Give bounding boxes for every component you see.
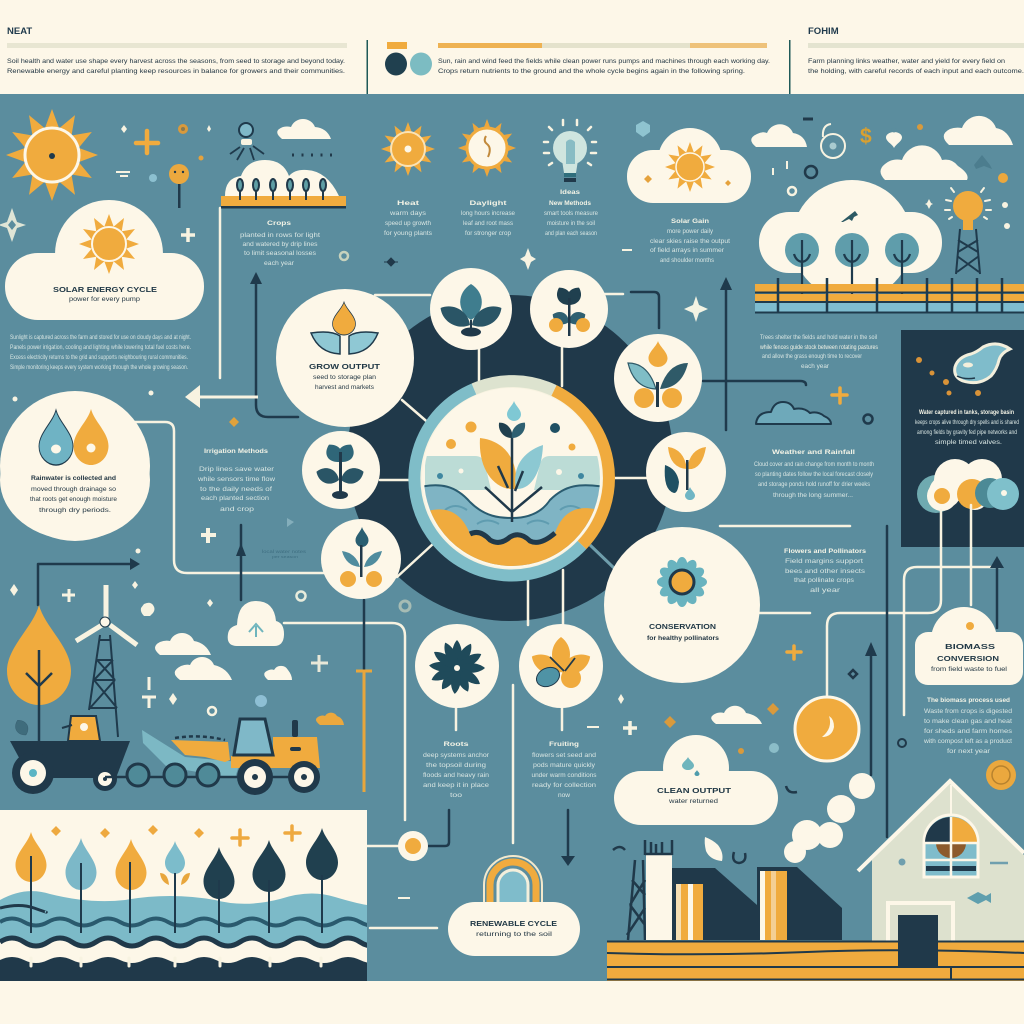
node: big top left: GROW OUTPUT xyxy=(309,362,381,371)
text blocks: three columns: for stronger crop xyxy=(465,231,512,237)
node: leaf top xyxy=(430,268,512,350)
header column: right: FOHIM xyxy=(808,26,839,37)
text block: mid right: and storage ponds hold runoff for drier weeks xyxy=(758,482,870,488)
text blocks: three columns: smart tools measure xyxy=(544,211,599,217)
panel: water cloud: CLEAN OUTPUT xyxy=(657,786,732,795)
text block: water: Drip lines save water xyxy=(199,467,274,473)
text block: crops: to limit seasonal losses xyxy=(244,251,316,257)
text block: crops xyxy=(240,220,320,267)
text block: mid right: Cloud cover and rain change from month to month xyxy=(754,462,874,468)
text block: left body: Sunlight is captured across the farm and stored for use on cloudy days and at night. xyxy=(10,335,191,341)
text blocks: three columns: Heat xyxy=(397,200,420,207)
medallion plant xyxy=(437,401,584,522)
text block: upper right: and allow the grass enough time to recover xyxy=(762,354,862,360)
panel: sun cloud xyxy=(5,200,204,320)
clouds: top right xyxy=(751,116,1013,180)
icon: rainbow pill xyxy=(448,856,580,956)
header column: left xyxy=(7,26,347,75)
text blocks: three columns: New Methods xyxy=(549,200,591,207)
icon: arrow cloud xyxy=(228,601,284,646)
text block: lower right: The biomass process used xyxy=(927,698,1010,704)
header column: right: the holding, with careful records of each input and each outcome. xyxy=(808,69,1024,75)
panel: water drops cloud: through dry periods. xyxy=(39,508,111,514)
text block: crops: and watered by drip lines xyxy=(242,242,318,248)
text block: bottom center left: and keep it in place xyxy=(423,783,490,789)
panel: bottom left field xyxy=(0,810,384,981)
cloud: small top xyxy=(277,119,331,139)
icon: orange ring xyxy=(986,760,1016,790)
node: big flower: CONSERVATION xyxy=(649,622,716,631)
header column: center xyxy=(385,42,770,76)
panel: water drops cloud xyxy=(0,391,150,541)
small marks left xyxy=(10,390,410,715)
text block: bottom center right: now xyxy=(558,793,571,799)
panel: sun cloud: power for every pump xyxy=(69,297,141,303)
small marks left: per season xyxy=(272,554,298,559)
text blocks: three columns: and plan each season xyxy=(545,231,597,237)
panel: water drops cloud: that roots get enough moisture xyxy=(30,497,118,503)
text block: sun cloud center xyxy=(650,218,730,264)
header column: center: Crops return nutrients to the ground and the whole cycle begins again in the following spring. xyxy=(438,69,745,75)
icon: house xyxy=(858,781,1024,941)
text block: water: Irrigation Methods xyxy=(204,448,268,455)
node: big top left: harvest and markets xyxy=(315,385,374,391)
header column: center: Sun, rain and wind feed the fields while clean power runs pumps and machines through each working day. xyxy=(438,59,770,65)
text block: upper right xyxy=(759,335,878,370)
satellite circles xyxy=(276,268,760,708)
text block: center right: Flowers and Pollinators xyxy=(784,548,866,555)
text block: bottom center right: pods mature quickly xyxy=(533,763,595,769)
text block: lower right: for sheds and farm homes xyxy=(924,729,1012,735)
panel: dark energy panel: simple timed valves. xyxy=(935,440,1002,446)
drop trees xyxy=(16,828,338,933)
panel: right bottom cloud: CONVERSION xyxy=(937,654,999,663)
text block: left body: Panels power irrigation, cooling and lighting while lowering total fuel costs here. xyxy=(10,345,191,351)
icon: cart xyxy=(10,716,130,794)
text block: bottom center left: too xyxy=(450,793,463,799)
small marks right xyxy=(832,388,872,424)
text blocks: three columns: leaf and root mass xyxy=(463,221,513,227)
text block: water xyxy=(197,448,276,513)
icon: rainbow pill: returning to the soil xyxy=(476,932,552,938)
text block: sun cloud center: clear skies raise the output xyxy=(650,239,730,245)
text block: center right xyxy=(784,548,866,594)
node: left lower xyxy=(321,519,401,599)
text block: bottom center right: ready for collection xyxy=(532,783,596,789)
panel: water drops cloud: Rainwater is collected and xyxy=(31,476,116,482)
clouds: left lower xyxy=(155,633,292,680)
node: bottom dark flower xyxy=(415,624,499,708)
icon: orange moon circle xyxy=(795,697,859,761)
header column: left: Soil health and water use shape every harvest across the seasons, from seed to storage and beyond today. xyxy=(7,59,345,65)
text block: water: to the daily needs of xyxy=(200,487,272,493)
text block: crops: each year xyxy=(264,261,294,267)
text blocks: three columns: long hours increase xyxy=(461,211,516,217)
small marks middle xyxy=(340,121,650,270)
text block: mid right xyxy=(754,449,874,499)
text blocks: three columns: warm days xyxy=(389,211,426,217)
text block: lower right: to make clean gas and heat xyxy=(924,719,1012,725)
smoke xyxy=(705,773,875,863)
text block: bottom center left: the topsoil during xyxy=(426,763,486,769)
panel: sun cloud center xyxy=(627,128,751,203)
text block: left body: Simple monitoring keeps every system working through the whole growing season. xyxy=(10,365,188,371)
header column: right: Farm planning links weather, water and yield for every field on xyxy=(808,59,1005,65)
text block: water: each planted section xyxy=(201,496,269,502)
text block: upper right: each year xyxy=(801,364,829,370)
text block: lower right: for next year xyxy=(947,749,990,755)
cloud: small right xyxy=(711,706,762,724)
text block: bottom center right: Fruiting xyxy=(549,741,579,748)
icon: cloud outline xyxy=(756,402,831,424)
icon: cloud with circles xyxy=(917,459,1019,513)
text block: center right: Field margins support xyxy=(785,559,863,565)
medallion landscape xyxy=(424,456,600,566)
text blocks: three columns: speed up growth xyxy=(385,221,431,227)
text blocks: three columns: moisture in the soil xyxy=(547,221,595,227)
panel: right bottom cloud xyxy=(915,607,1023,685)
text block: bottom center right xyxy=(532,741,596,799)
panel: tree cloud xyxy=(759,180,942,312)
arrowheads xyxy=(130,272,1004,866)
icon: rainbow pill: RENEWABLE CYCLE xyxy=(470,919,557,928)
text block: upper right: while fences guide stock between rotating pastures xyxy=(759,345,878,351)
text block: bottom center left: deep systems anchor xyxy=(423,753,489,759)
text block: center right: that pollinate crops xyxy=(794,578,854,584)
panel: right bottom cloud: from field waste to fuel xyxy=(931,667,1007,673)
text block: bottom center right: flowers set seed and xyxy=(532,753,596,759)
connector lines xyxy=(38,208,1000,928)
decorative sparkles top left xyxy=(0,124,211,242)
text block: mid right: Weather and Rainfall xyxy=(772,449,855,456)
icon: sprinkler xyxy=(230,123,264,160)
text block: left body: Excess electricity returns to the grid and supports neighbouring rural communities. xyxy=(10,355,188,361)
fence xyxy=(755,278,1024,312)
dotted row xyxy=(292,154,336,156)
icon: tractor xyxy=(231,719,320,795)
sparkle xyxy=(684,296,708,322)
text block: center right: all year xyxy=(810,588,840,594)
text block: mid right: so planting dates follow the local forecast closely xyxy=(755,472,873,478)
text blocks: three columns: Daylight xyxy=(470,200,508,207)
small marks center xyxy=(398,646,906,898)
cloud: small orange xyxy=(316,713,344,725)
text block: upper right: Trees shelter the fields and hold water in the soil xyxy=(760,335,877,341)
icons: top right symbols: $ xyxy=(860,125,872,148)
central medallion xyxy=(410,376,614,580)
sparks xyxy=(916,357,981,396)
text blocks: three columns: for young plants xyxy=(384,231,432,237)
text block: sun cloud center: more power daily xyxy=(667,229,713,235)
arrow: cream left arrow xyxy=(185,385,258,408)
header column: left: Renewable energy and careful planting keep resources in balance for growers and their communities. xyxy=(7,69,345,75)
node: junction dot xyxy=(398,831,428,861)
node: big top left: seed to storage plan xyxy=(313,375,376,381)
text block: sun cloud center: Solar Gain xyxy=(671,218,709,225)
node: left middle xyxy=(302,431,380,509)
orange stars xyxy=(51,825,300,845)
window xyxy=(924,815,978,877)
text block: bottom center left: Roots xyxy=(444,741,469,748)
icon: crop greenhouse xyxy=(221,160,346,208)
icons: top right symbols xyxy=(773,119,1008,195)
panel: water cloud xyxy=(614,735,778,825)
panel: right bottom cloud: BIOMASS xyxy=(945,642,995,651)
ground xyxy=(607,915,1024,981)
icon: big sun xyxy=(6,109,98,201)
text block: water: and crop xyxy=(220,507,255,513)
text block: bottom center right: under warm conditions xyxy=(532,773,596,779)
text blocks: three columns xyxy=(384,189,599,237)
header column: right xyxy=(808,26,1024,75)
text block: lower right xyxy=(923,698,1012,755)
icon: orange tree drop xyxy=(7,605,71,741)
icon: small leaf xyxy=(12,717,31,738)
icon: two drops xyxy=(39,409,108,465)
icon: factory xyxy=(613,840,842,940)
icon: wind turbine tower xyxy=(76,585,137,737)
text block: sun cloud center: and shoulder months xyxy=(660,258,714,264)
text block: crops: Crops xyxy=(267,220,291,227)
icon: sun xyxy=(665,142,715,192)
icon: sun 3 xyxy=(381,122,435,176)
header column: left: NEAT xyxy=(7,26,32,37)
node: right upper xyxy=(614,334,702,422)
trees xyxy=(785,233,919,312)
text block: crops: planted in rows for light xyxy=(240,233,320,239)
panel: water drops cloud: moved through drainage so xyxy=(31,487,117,493)
node: sprout top xyxy=(530,270,608,348)
small marks near factory xyxy=(733,786,797,863)
icon: conveyor xyxy=(105,730,300,786)
text block: bottom center left: floods and heavy rain xyxy=(423,773,489,779)
panel: dark energy panel xyxy=(901,330,1024,547)
text blocks: three columns: Ideas xyxy=(560,189,580,196)
text block: mid right: through the long summer... xyxy=(773,493,853,499)
node: right lower xyxy=(646,432,726,512)
bottom cream strip xyxy=(0,981,1024,1024)
panel: sun cloud: SOLAR ENERGY CYCLE xyxy=(53,285,157,294)
orange post xyxy=(356,671,372,792)
text block: sun cloud center: of field arrays in summer xyxy=(650,248,724,254)
central dark disc xyxy=(347,295,673,621)
text block: water: while sensors time flow xyxy=(197,477,276,483)
text block: center right: bees and other insects xyxy=(785,569,865,575)
text block: lower right: with compost left as a product xyxy=(923,739,1012,745)
icon: light bulb xyxy=(544,120,596,182)
icon: sun 4 xyxy=(458,119,516,177)
text block: lower right: Waste from crops is digested xyxy=(924,709,1012,715)
small marks left: local water notes xyxy=(262,549,307,554)
icon: bulb tower xyxy=(925,188,1010,274)
node: big flower xyxy=(604,527,760,683)
icon: water droplet xyxy=(955,344,1010,383)
node: bottom orange leaves xyxy=(519,624,603,708)
header band xyxy=(0,0,1024,94)
text block: bottom center left xyxy=(423,741,490,799)
node: big flower: for healthy pollinators xyxy=(647,636,720,642)
icon: sun xyxy=(79,214,139,274)
text block: left body xyxy=(10,335,191,371)
node: big top left xyxy=(276,289,414,427)
panel: water cloud: water returned xyxy=(668,799,718,805)
